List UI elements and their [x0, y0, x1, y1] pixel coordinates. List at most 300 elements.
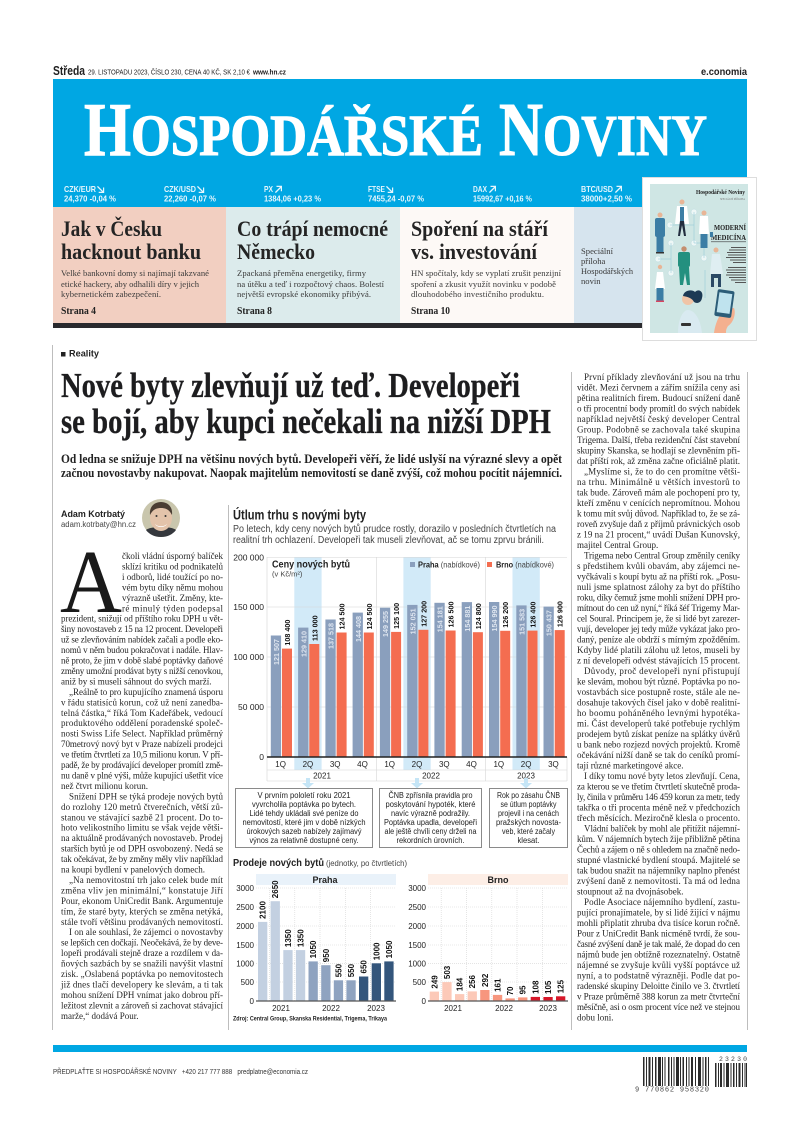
article text: right column: Čechů a zájem o ně s ohledem na značně nedo-: [577, 844, 740, 854]
article text: right column: Důvody, proč developeři nyní přistupují: [584, 666, 740, 676]
masthead title: H: [84, 88, 131, 172]
bar chart: apartment prices: 137 518: [327, 623, 336, 649]
teaser: Germany: [226, 207, 400, 323]
article text: right column: zvýšení daně z nemovitosti. Ta má od ledna: [577, 876, 740, 886]
article text: right column: stoupnout až na dvojnásobek.: [577, 886, 683, 896]
callout: 2022: ČNB zpřísnila pravidla pro: [388, 791, 473, 800]
callout: 2023: projevil i na cenách: [498, 809, 559, 818]
article text: right column: nyní, a to podstatně výrazněji. Podle dat po-: [577, 970, 740, 980]
article text: left column: stanou ve stávající sazbě 21 procent. Do to-: [61, 812, 223, 822]
bar chart: apartment prices: 4Q: [357, 760, 368, 769]
headline: Nové byty zlevňují už teď. Developeři: [61, 366, 520, 405]
article text: left column: „Reálně to pro kupujícího znamená úsporu: [69, 687, 224, 697]
barcode: 9 770862 958320: [635, 1086, 709, 1094]
market tickers: 1384,06 +0,23 %: [264, 194, 321, 204]
headline: se bojí, aby kupci nečekali na nižší DPH: [61, 402, 551, 441]
article text: right column: nájmů bude jen obtížně rozeznatelný. Ostatně: [577, 950, 740, 960]
article text: right column: Trigema. Další, třeba rezidenční část stavební: [577, 435, 740, 445]
bar chart: Praha sales: 500: [241, 978, 255, 987]
bar chart: Praha sales: 2021: [272, 1004, 290, 1013]
callout: 2023: pražských novosta-: [496, 818, 561, 827]
bar chart: Brno sales: 2021: [444, 1004, 462, 1013]
barcode: 23230: [719, 1056, 747, 1063]
article text: left column: výrazně ušetřit. Změny, kte-: [122, 593, 223, 603]
bar chart: apartment prices: 100 000: [233, 652, 264, 662]
article text: right column: měsíčně, asi o osm procent více než ve stejnou: [577, 1002, 740, 1012]
article text: left column: produktového oddělení poradenské společ-: [61, 718, 223, 728]
bar chart: Brno sales: 95: [519, 985, 528, 994]
article text: right column: takřka o tři procenta méně než v předchozích: [577, 802, 740, 812]
bar chart: apartment prices: 3Q: [330, 760, 341, 769]
article text: left column: nomů v něm budou pokračovat i nadále. Hlav-: [61, 645, 223, 655]
bar chart: Praha sales: 1000: [236, 960, 255, 969]
bar chart: Praha sales: 2000: [236, 922, 255, 931]
article text: right column: dat příští rok, až změna začne oficiálně platit.: [577, 456, 740, 466]
infographic heading: Po letech, kdy ceny nových bytů prudce rostly, dorazilo v posledních čtvrtletích na: [233, 523, 556, 535]
callout: 2023: [490, 788, 568, 848]
bar chart: Brno sales: 1500: [408, 941, 427, 950]
bar chart: apartment prices: 1Q: [493, 760, 504, 769]
teaser: pension savings: spoření a zkusit využít novinku v podobě: [411, 279, 556, 289]
article text: left column: se lepších cen dočkají. Neočekává, že by deve-: [61, 938, 223, 948]
callout: 2022: [380, 788, 482, 848]
sales heading: (jednotky, po čtvrtletích): [326, 859, 407, 868]
article text: left column: změny umožní prodávat byty s nižší cenovkou,: [61, 666, 223, 676]
article text: right column: u bank nebo rozjezd nových projektů. Kromě: [577, 740, 740, 750]
article text: right column: ho boomu poháněného levnými hypotéka-: [577, 708, 740, 718]
bar chart: Brno sales: 256: [468, 975, 477, 988]
barcode: [635, 1056, 747, 1094]
bar chart: apartment prices: 126 400: [528, 602, 538, 628]
teaser: hack bank: hacknout banku: [61, 239, 201, 264]
source note: Zdroj: Central Group, Skanska Residential, Trigema, Trikaya: [233, 1016, 387, 1023]
callout: 2021: [236, 788, 372, 848]
bar chart: Brno sales: 2022: [495, 1004, 513, 1013]
article text: left column: [60, 551, 224, 1021]
masthead title: N: [499, 88, 543, 172]
bar chart: apartment prices: 149 255: [381, 611, 390, 637]
masthead title: OSPODÁŘSKÉ: [131, 103, 483, 168]
article text: left column: ně proto, že jim v době slabé poptávky daňové: [61, 656, 223, 666]
bar chart: apartment prices: 150 000: [233, 602, 264, 612]
bar chart: apartment prices: 2022: [422, 772, 440, 780]
bar chart: apartment prices: 113 000: [310, 615, 319, 641]
market tickers: 24,370 -0,04 %: [64, 194, 116, 204]
article text: right column: vostavbách sice postupně roste, stále ale ne-: [577, 687, 740, 697]
market tickers: BTC/USD: [581, 184, 613, 194]
callout: 2021: výnos za relativně dostupné ceny.: [250, 836, 358, 845]
article text: right column: Kdyby lidé platili zálohu už letos, museli by: [577, 645, 740, 655]
bar chart: Brno sales: 1000: [408, 960, 427, 969]
article text: left column: aniž by si museli sáhnout do svých marží.: [61, 676, 211, 686]
author: adam.kotrbaty@hn.cz: [61, 520, 136, 529]
market tickers: [64, 184, 632, 204]
sales heading: Prodeje nových bytů: [233, 857, 324, 869]
article text: right column: vyčkávali s koupí bytu až na příští rok. „Posu-: [577, 572, 740, 582]
supplement cover: Hospodářské Noviny: [696, 190, 745, 196]
teaser: Germany: Německo: [237, 239, 315, 264]
article text: right column: o tři procentní body promítl do svých nabídek: [577, 404, 740, 414]
bar chart: apartment prices: 126 200: [501, 602, 510, 628]
article text: left column: ré minulý týden podepsal: [122, 603, 223, 613]
article text: right column: Trigema nebo Central Group změnily ceníky: [584, 550, 740, 560]
teaser: pension savings: vs. investování: [411, 239, 538, 264]
supplement cover: MEDICÍNA: [711, 234, 746, 242]
article text: right column: třech měsících. Meziročně klesla o procento.: [577, 813, 740, 823]
article text: right column: skupiny Skanska, se hodlají se zlevněním při-: [577, 446, 740, 456]
bar chart: apartment prices: 154 990: [490, 606, 499, 631]
article text: right column: cel Soural. Principem je, že si lidé byt zarezer-: [577, 614, 740, 624]
article text: left column: marže,“ dodává Pour.: [61, 1011, 138, 1021]
bar chart: apartment prices: 108 400: [283, 620, 292, 646]
bar chart: apartment prices: (v Kč/m²): [272, 570, 303, 578]
article text: left column: stále tvoří většinu prodávaných nemovitostí.: [61, 917, 223, 927]
article text: left column: nosti Swiss Life Select. Například průměrný: [61, 729, 224, 739]
article text: left column: 70metrový nový byt v Praze nabízeli prodejci: [61, 739, 223, 749]
teaser: special supplement: novin: [581, 276, 601, 286]
article text: right column: majitel Central Group.: [577, 540, 658, 550]
bar chart: Praha sales: Praha: [312, 875, 339, 885]
article text: left column: na aktuálně prodávaných novostaveb. Prodej: [61, 833, 223, 843]
market tickers: FTSE: [368, 184, 385, 194]
callout: 2023: veb, které začaly: [502, 827, 555, 836]
bar chart: apartment prices: 0: [259, 752, 264, 762]
article text: left column: tím, že staré byty, kterých se změna netýká,: [61, 906, 223, 916]
article text: left column: čkoli vládní úsporný balíček: [122, 551, 224, 561]
bar chart: apartment prices: 154 181: [436, 606, 445, 632]
article text: right column: „Myslíme si, že to do cen promítne větši-: [584, 466, 740, 476]
footer bar: [53, 1045, 747, 1052]
bar chart: apartment prices: 124 800: [474, 603, 483, 629]
date line: Středa: [53, 63, 86, 78]
bar chart: Brno sales: Brno: [488, 875, 509, 885]
author photo: [142, 499, 180, 537]
bar chart: Praha sales: 650: [360, 960, 369, 974]
bar chart: apartment prices: 144 408: [354, 616, 363, 642]
bar chart: apartment prices: 2023: [517, 772, 535, 780]
bar chart: apartment prices: [233, 552, 567, 781]
teaser: pension savings: HN spočítaly, kdy se vyplatí zrušit penzijní: [411, 268, 562, 278]
callout: 2023: Rok po zásahu ČNB: [497, 791, 560, 800]
infographic heading: [233, 508, 556, 546]
bar chart: Brno sales: 292: [481, 973, 490, 987]
article text: left column: telná částka,“ říká Tom Kadeřábek, vedoucí: [61, 708, 223, 718]
teaser: special supplement: Speciální: [581, 246, 614, 256]
bar chart: Praha sales: 2650: [271, 880, 280, 898]
bar chart: Brno sales: 70: [506, 986, 515, 995]
article text: left column: sklízí kritiku od podnikatelů: [122, 561, 224, 571]
bar chart: Brno sales: 503: [443, 965, 452, 979]
article text: right column: pující pronajímatele, by si lidé žijící v nájmu: [577, 908, 740, 918]
teaser: Germany: Co trápí nemocné: [237, 216, 388, 241]
article text: right column: pětina realitních firem. Budoucí snížení daně: [577, 393, 740, 403]
article text: left column: již dnes tlačí developery ke slevám, a ti tak: [60, 979, 224, 989]
teaser: special supplement: příloha: [581, 256, 606, 266]
market tickers: 7455,24 -0,07 %: [368, 194, 424, 204]
bar chart: Praha sales: 1050: [309, 940, 318, 958]
article text: left column: tak očekávat, že by změny měly vliv například: [61, 854, 224, 864]
masthead title: [84, 88, 707, 172]
bar chart: apartment prices: 2Q: [303, 760, 313, 769]
bar chart: apartment prices: 2Q: [412, 760, 422, 769]
article text: left column: „Na nemovitostní trh jako celek bude mít: [69, 875, 223, 885]
article text: right column: [577, 372, 740, 1022]
article text: right column: časné zvýšení daně je tak malé, že dopad do cen: [577, 939, 740, 949]
market tickers: DAX: [473, 184, 487, 194]
article text: right column: nuli jsme splatnost zálohy za byt do příštího: [577, 582, 740, 592]
bar chart: Praha sales: 950: [322, 948, 331, 962]
bar chart: Brno sales: 2023: [539, 1004, 557, 1013]
bar chart: Brno sales: 3000: [408, 884, 427, 893]
teaser: hack bank: [53, 207, 226, 323]
article text: right column: očekávání nižší daně se tak do ceníků promí-: [577, 750, 740, 760]
article text: right column: mi. Část developerů také potřebuje rychlým: [577, 718, 740, 728]
bar chart: Praha sales: 1350: [284, 929, 293, 947]
sales heading: [233, 857, 407, 869]
bar chart: Praha sales: [236, 874, 396, 1013]
article text: left column: ve třetím čtvrtletí za 10,5 milionu korun. V pří-: [61, 750, 223, 760]
article text: right column: dosahuje takových čísel jako v době realitní-: [577, 698, 740, 708]
article text: right column: za kterou se ve třetím čtvrtletí skutečně proda-: [577, 782, 740, 792]
bar chart: Praha sales: 2022: [322, 1004, 340, 1013]
bar chart: Praha sales: 1000: [372, 942, 381, 960]
article text: left column: Snížení DPH se týká prodeje nových bytů: [69, 791, 224, 801]
article text: right column: daný, peníze ale obdrží s mírným zpožděním.: [577, 634, 740, 644]
article text: right column: kům. V nájemních bytech žije přibližně pětina: [577, 834, 740, 844]
market tickers: PX: [264, 184, 273, 194]
bar chart: Praha sales: 1500: [236, 941, 255, 950]
arrows to callouts: [302, 778, 532, 788]
article text: right column: mohli připlatit zhruba dva tisíce korun ročně.: [577, 918, 740, 928]
bar chart: apartment prices: 151 583: [518, 609, 526, 635]
article text: right column: tak bude. Zároveň mám ale pochopení pro ty,: [577, 488, 740, 498]
bar chart: apartment prices: 121 507: [272, 639, 281, 665]
bar chart: apartment prices: 4Q: [466, 760, 477, 769]
bar chart: apartment prices: 150 437: [545, 610, 554, 636]
drop cap: A: [60, 533, 122, 632]
callout: 2022: Poptávka upadla, developeři: [384, 818, 477, 827]
article text: left column: padě, že by prodávající developer promítl změ-: [61, 760, 223, 770]
bar chart: Brno sales: 249: [430, 975, 439, 989]
infographic heading: Útlum trhu s novými byty: [233, 508, 366, 522]
callout: 2021: úrokových sazeb nabízely zajímavý: [246, 827, 362, 836]
article text: right column: na trhu. Minimálně u větších investorů to: [577, 477, 740, 487]
teaser: special supplement: [574, 207, 644, 323]
bar chart: Praha sales: 2500: [236, 903, 255, 912]
teaser: Germany: Strana 8: [237, 306, 272, 317]
article text: left column: už se zlevňováním nabídek začali a podle eko-: [61, 635, 223, 645]
article text: left column: i odborů, lidé toužící po no-: [122, 572, 223, 582]
teaser: special supplement: Hospodářských: [581, 266, 634, 276]
teaser: hack bank: Jak v Česku: [61, 216, 162, 241]
bar chart: apartment prices: 124 500: [338, 604, 347, 630]
teaser: pension savings: dlouhodobého investičního produktu.: [411, 289, 544, 299]
bar chart: Brno sales: 105: [544, 980, 553, 994]
article text: right column: radenské skupiny Deloitte činilo ve 3. čtvrtletí: [577, 981, 740, 991]
article text: right column: dobu loni.: [577, 1012, 614, 1022]
author: Adam Kotrbatý: [61, 509, 125, 519]
bar chart: apartment prices: 3Q: [548, 760, 559, 769]
article text: right column: k tomu mít svůj důvod. Například to, že se zá-: [577, 508, 740, 518]
bar chart: apartment prices: 3Q: [439, 760, 450, 769]
article text: left column: ležitost zlevnit a zároveň si zachovat stávající: [61, 1000, 223, 1010]
bar chart: apartment prices: Ceny nových bytů: [272, 559, 350, 571]
date line: 29. LISTOPADU 2023, ČÍSLO 230, CENA 40 KČ, SK 2,10 €: [88, 68, 250, 76]
article text: left column: šiny novostaveb z 15 na 12 procent. Developeři: [61, 624, 223, 634]
bar chart: apartment prices: 2Q: [521, 760, 531, 769]
article text: right column: roveň zvyšuje daň z příjmů právnických osob: [577, 519, 740, 529]
supplement cover: SPECIÁLNÍ PŘÍLOHA: [720, 196, 745, 201]
article text: left column: prezident, snižují od příštího roku DPH u vět-: [61, 614, 223, 624]
teaser: hack bank: etické hackery, aby odhalili díry v jejich: [61, 279, 200, 289]
article text: right column: ly, činila v průměru 146 459 korun za metr, tedy: [577, 792, 740, 802]
article text: left column: I on ale souhlasí, že zájemci o novostavby: [69, 927, 224, 937]
bar chart: Brno sales: 161: [494, 978, 502, 992]
bar chart: Brno sales: 0: [422, 997, 427, 1006]
article text: left column: hoto velikostního limitu se však vejde větši-: [61, 823, 223, 833]
market tickers: CZK/USD: [164, 184, 196, 194]
headline: [61, 366, 551, 441]
bar chart: apartment prices: 152 051: [408, 608, 417, 634]
article text: right column: nájemné se zvyšuje kvůli vyšší poptávce už: [577, 960, 740, 970]
article text: right column: vidět. Mezi červnem a zářím snížila ceny asi: [577, 382, 740, 392]
market tickers: CZK/EUR: [64, 184, 96, 194]
subscription line: PŘEDPLAŤTE SI HOSPODÁŘSKÉ NOVINY +420 217 777 888 predplatne@economia.cz: [53, 1067, 308, 1076]
article text: right column: z ní developeři odvést stávajících 15 procent.: [577, 656, 740, 666]
masthead title: OVINY: [543, 103, 707, 168]
market tickers: 22,260 -0,07 %: [164, 194, 216, 204]
article text: right column: mítnout do cen už nyní,“ říká šéf Trigemy Mar-: [577, 603, 740, 613]
article text: left column: vém bytu díky němu mohou: [122, 582, 224, 592]
article text: left column: starších bytů je od DPH osvobozený. Nedá se: [61, 844, 223, 854]
teaser: pension savings: Spoření na stáří: [411, 216, 549, 241]
article text: right column: Podle Asociace nájemního bydlení, zastu-: [584, 897, 740, 907]
bar chart: apartment prices: 126 500: [447, 602, 456, 628]
article text: right column: První příklady zlevňování už jsou na trhu: [584, 372, 740, 382]
article text: left column: Pour, ekonom UniCredit Bank. Argumentuje: [61, 896, 223, 906]
bar chart: apartment prices: 2021: [313, 772, 331, 780]
article text: right column: vují, developer jej tedy může vykázat jako pro-: [577, 624, 740, 634]
article text: right column: ke slevám, mohou být různé. Poptávka po no-: [577, 676, 740, 686]
date line: [53, 63, 286, 78]
bar chart: Brno sales: 500: [413, 978, 427, 987]
bar chart: Praha sales: 550: [334, 963, 343, 977]
callout: 2022: ale ještě chvíli ceny drželi na: [384, 827, 477, 836]
article text: left column: na koupi bydlení v panelových domech.: [61, 864, 205, 874]
teaser: hack bank: Strana 4: [61, 306, 97, 317]
author: [61, 509, 136, 529]
article text: left column: zisk. „Oslabená poptávka po nemovitostech: [61, 969, 224, 979]
article text: right column: Group. Podobně se zachovala také skupina: [577, 424, 740, 434]
article text: left column: mohou snížení DPH vnímat jako dobrou pří-: [61, 990, 223, 1000]
bar chart: Praha sales: 550: [347, 963, 356, 977]
bar chart: Brno sales: [408, 874, 568, 1013]
article text: left column: nu daně v plné výši, může kupující ušetřit více: [61, 770, 223, 780]
teaser: Germany: na útěku a teď i rozpočtový chaos. Bolestí: [237, 279, 385, 289]
article text: left column: v řádu statisíců korun, což už není zanedba-: [61, 697, 223, 707]
article text: left column: než čtvrt milionu korun.: [61, 781, 148, 791]
bar chart: Praha sales: 1050: [385, 940, 394, 958]
callout: 2023: klesat.: [518, 836, 540, 845]
article text: left column: do rozlohy 120 metrů čtverečních, větší zů-: [61, 802, 223, 812]
bar chart: Praha sales: 0: [250, 997, 255, 1006]
bar chart: apartment prices: 124 500: [365, 604, 374, 630]
teaser: pension savings: Strana 10: [411, 306, 450, 317]
bar chart: Praha sales: 3000: [236, 884, 255, 893]
bar chart: Brno sales: 2000: [408, 922, 427, 931]
article text: right column: Vládní balíček by mohl ale přitížit nájemní-: [584, 824, 740, 834]
market tickers: 38000+2,50 %: [581, 194, 632, 204]
column rules: [52, 345, 748, 1030]
article text: left column: lopeři prodávali stejně draze a rozdílem v da-: [61, 948, 223, 958]
deck: začnou novostavby nakupovat. Naopak majitelům nemovitostí se daně zvýší, což mohou pocítit nájemníci.: [61, 466, 562, 480]
article text: right column: Pour z UniCredit Bank nicméně tvrdí, že sou-: [577, 928, 740, 938]
bar chart: Brno sales: 108: [531, 980, 540, 994]
article text: right column: tak budou snažit na nájemníky naplno přenést: [577, 866, 740, 876]
teaser: Germany: Zpackaná přeměna energetiky, firmy: [237, 268, 367, 278]
deck: Od ledna se snižuje DPH na většinu nových bytů. Developeři věří, že lidé uslyší na výrazné slevy a opět: [61, 452, 563, 466]
callout: 2021: Lidé tehdy ukládali své peníze do: [250, 809, 359, 818]
article text: right column: kteří změnu v cenících nepromítnou. Mohou: [577, 498, 740, 508]
article text: right column: v Praze průměrně 388 korun za metr čtvrteční: [577, 992, 740, 1002]
article text: right column: stupné vlastnické bydlení stoupá. Majitelé se: [577, 855, 740, 865]
bar chart: Brno sales: 125: [557, 979, 566, 993]
callout: 2022: rekordních úrovních.: [396, 836, 464, 845]
bar chart: apartment prices: 125 100: [392, 603, 401, 629]
article text: left column: ňových sazbách by se snažili navýšit vlastní: [61, 959, 223, 969]
bar chart: Brno sales: 184: [456, 977, 465, 991]
publisher logo: e.conomia: [701, 67, 747, 78]
bar chart: Praha sales: 2023: [367, 1004, 385, 1013]
bar chart: apartment prices: 129 410: [299, 631, 308, 657]
masthead band: [53, 79, 747, 207]
bar chart: apartment prices: 1Q: [275, 760, 286, 769]
article text: right column: prodejem bytů získat peníze na splátky úvěrů: [577, 729, 740, 739]
teaser: pension savings: [400, 207, 574, 323]
bar chart: Praha sales: 1350: [296, 929, 306, 947]
callout: 2021: nemovitostí, které jim v době nízkých: [242, 818, 366, 827]
callout: 2021: V prvním pololetí roku 2021: [258, 791, 351, 800]
article text: right column: tají různé marketingové akce.: [577, 760, 683, 770]
bar chart: apartment prices: 200 000: [233, 552, 264, 562]
supplement cover: MODERNÍ: [714, 224, 746, 232]
bar chart: apartment prices: 50 000: [238, 702, 264, 712]
bar chart: apartment prices: 154 881: [463, 606, 472, 632]
article text: left column: změna vliv jen minimální,“ konstatuje Jiří: [61, 885, 223, 895]
date line: www.hn.cz: [252, 70, 286, 76]
bar chart: apartment prices: Brno (nabídkové): [496, 560, 554, 570]
deck: [61, 452, 563, 480]
article text: right column: I díky tomu nové byty letos zlevňují. Cena,: [584, 771, 740, 781]
teaser: Germany: největší evropské ekonomiky přibývá.: [237, 289, 371, 299]
callout: 2021: vyvrcholila poptávka po bytech.: [252, 800, 356, 809]
article text: right column: například největší český developer Central: [577, 414, 740, 424]
infographic heading: realitní trh ochlazení. Developeři tak museli zlevňovat, ač se tomu zprvu bránili.: [233, 535, 544, 546]
article text: right column: s předstihem kvůli obavám, aby zájemci ne-: [577, 561, 740, 571]
bar chart: apartment prices: Praha (nabídkové): [418, 560, 480, 570]
bar chart: apartment prices: 126 900: [556, 601, 565, 627]
callout: 2022: navíc výrazně podražily.: [391, 809, 470, 818]
market tickers: 15992,67 +0,16 %: [473, 194, 532, 204]
bar chart: Brno sales: 2500: [408, 903, 427, 912]
callout: 2022: poskytování hypoték, které: [386, 800, 476, 809]
teaser: hack bank: kybernetickém zabezpečení.: [61, 289, 161, 299]
supplement cover: [642, 178, 756, 340]
bar chart: apartment prices: 1Q: [384, 760, 395, 769]
callout: 2023: se útlum poptávky: [500, 800, 556, 809]
article text: right column: z 19 na 21 procent,“ uvádí Dušan Kunovský,: [577, 530, 740, 540]
bar chart: Praha sales: 2100: [259, 901, 268, 919]
